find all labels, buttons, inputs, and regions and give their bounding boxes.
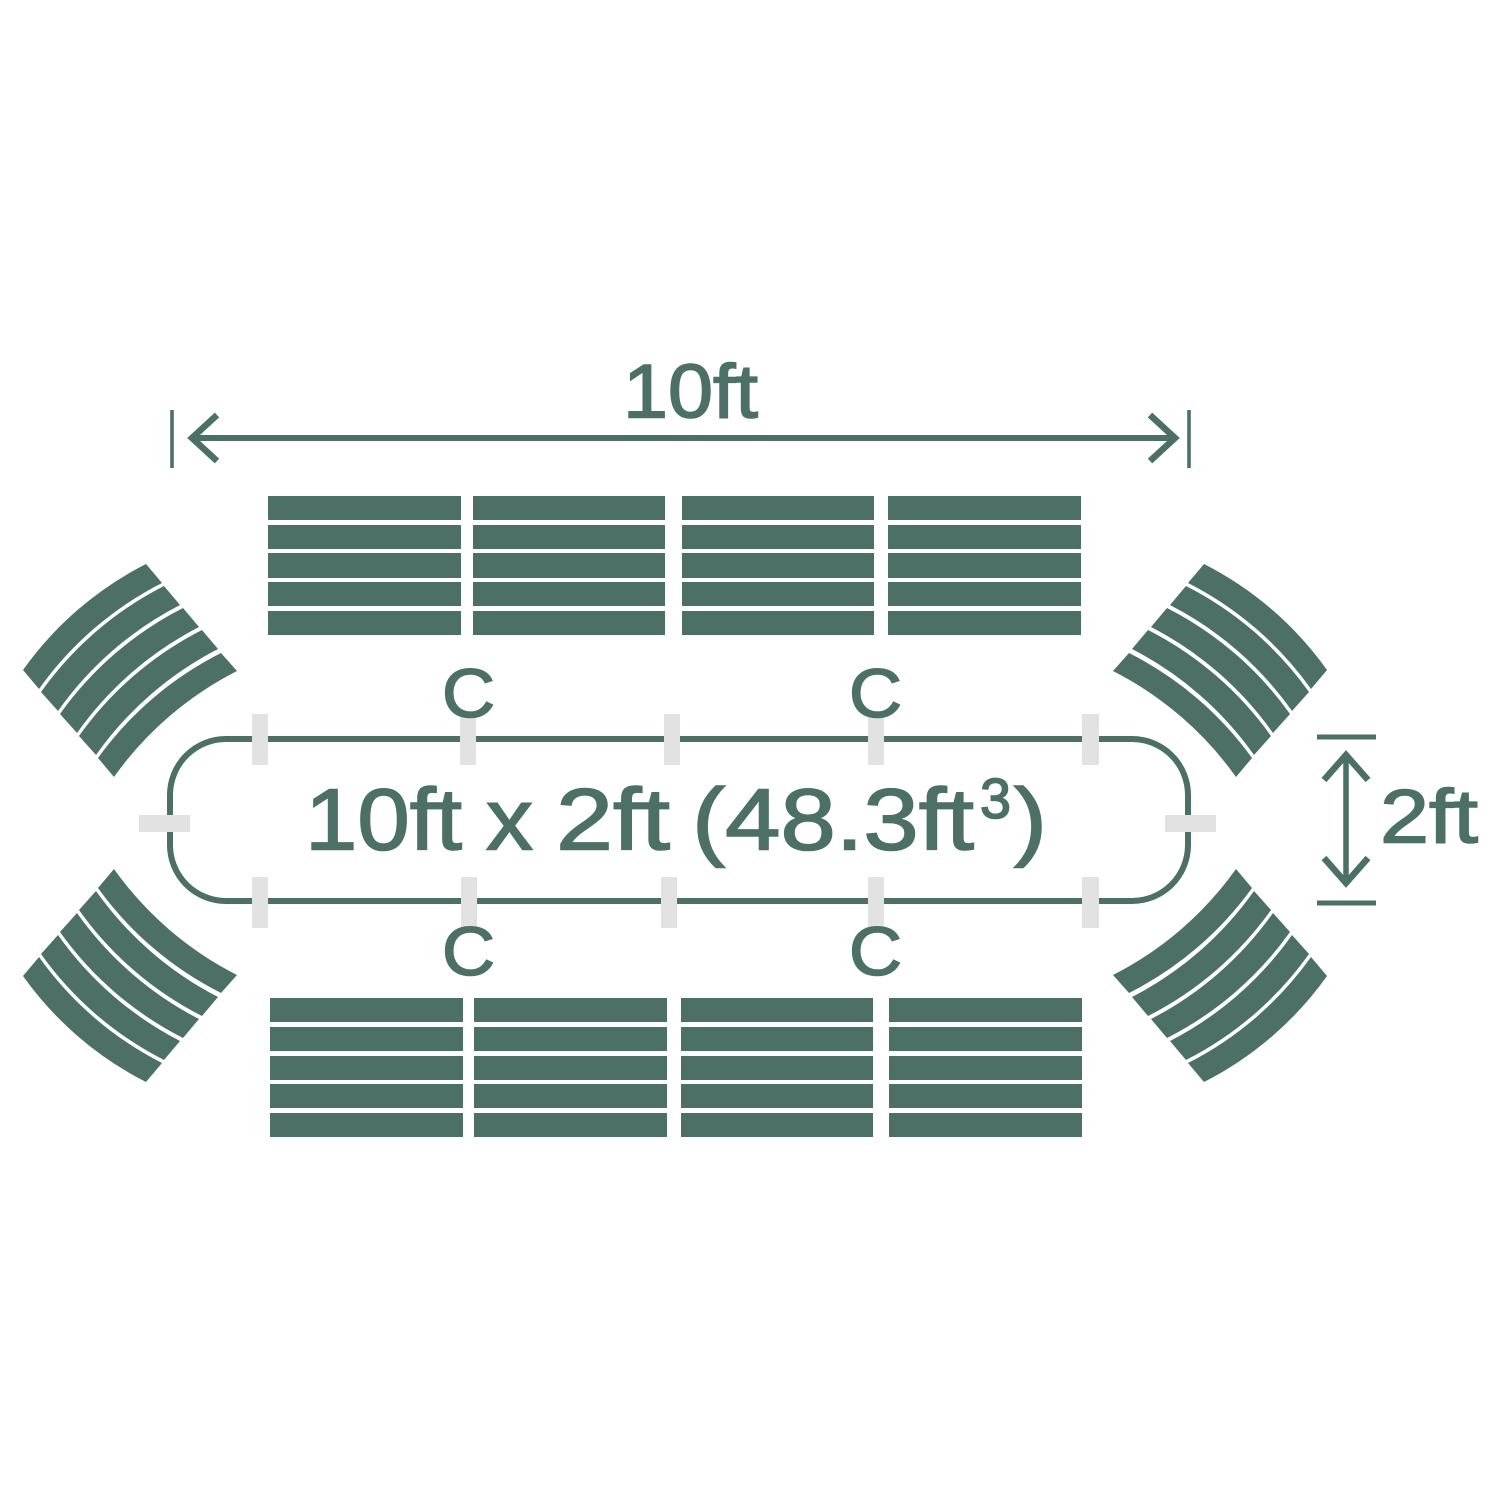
- curved bench: bottom left: [23, 869, 237, 1082]
- curved bench: top left: [23, 564, 237, 777]
- connector labels: C: [442, 913, 495, 990]
- curved bench: top right: [1113, 564, 1327, 777]
- connector labels: C: [849, 913, 902, 990]
- width label: 10ft: [623, 350, 758, 434]
- depth dimension arrow: [1317, 737, 1376, 903]
- table dimensions label: ): [1014, 772, 1047, 868]
- table dimensions label: (48.3ft: [692, 772, 974, 868]
- connector labels: [442, 655, 902, 990]
- top bench: [268, 496, 1081, 635]
- bottom bench: [270, 998, 1082, 1137]
- table dimensions label: [305, 767, 1047, 868]
- connector labels: C: [442, 655, 495, 732]
- depth label: 2ft: [1380, 774, 1478, 860]
- connector labels: C: [849, 655, 902, 732]
- table outline: [170, 739, 1188, 901]
- table dimensions label: 2ft: [556, 772, 670, 868]
- table dimensions label: 10ft: [305, 772, 462, 868]
- table connector ticks: [139, 714, 1216, 928]
- curved bench: bottom right: [1113, 869, 1327, 1082]
- table dimensions label: x: [486, 772, 533, 868]
- width dimension arrow: [172, 410, 1189, 468]
- table dimensions label: 3: [980, 767, 1011, 831]
